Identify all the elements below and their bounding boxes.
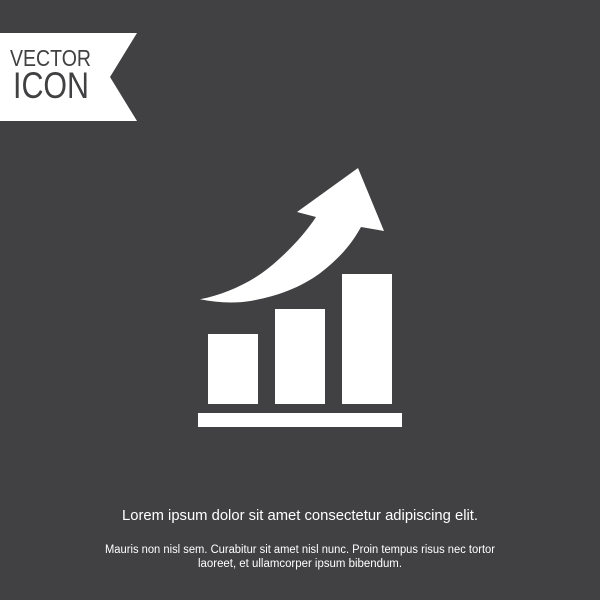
headline caption: Lorem ipsum dolor sit amet consectetur adipiscing elit.: [122, 507, 478, 524]
icon: growth bar chart with rising arrow: [198, 168, 402, 427]
vector icon ribbon badge: ICON: [13, 65, 89, 106]
rising arrow: [200, 168, 384, 302]
bar 2: [275, 309, 325, 404]
vector icon ribbon badge: VECTOR: [10, 45, 91, 71]
body caption: Mauris non nisl sem. Curabitur sit amet nisl nunc. Proin tempus risus nec tortor: [105, 544, 495, 556]
body caption: [105, 544, 495, 570]
bar 3: [342, 274, 392, 404]
bar 1: [208, 334, 258, 404]
body caption: laoreet, et ullamcorper ipsum bibendum.: [198, 558, 402, 570]
vector icon ribbon badge: [0, 33, 137, 121]
chart baseline: [198, 413, 402, 427]
